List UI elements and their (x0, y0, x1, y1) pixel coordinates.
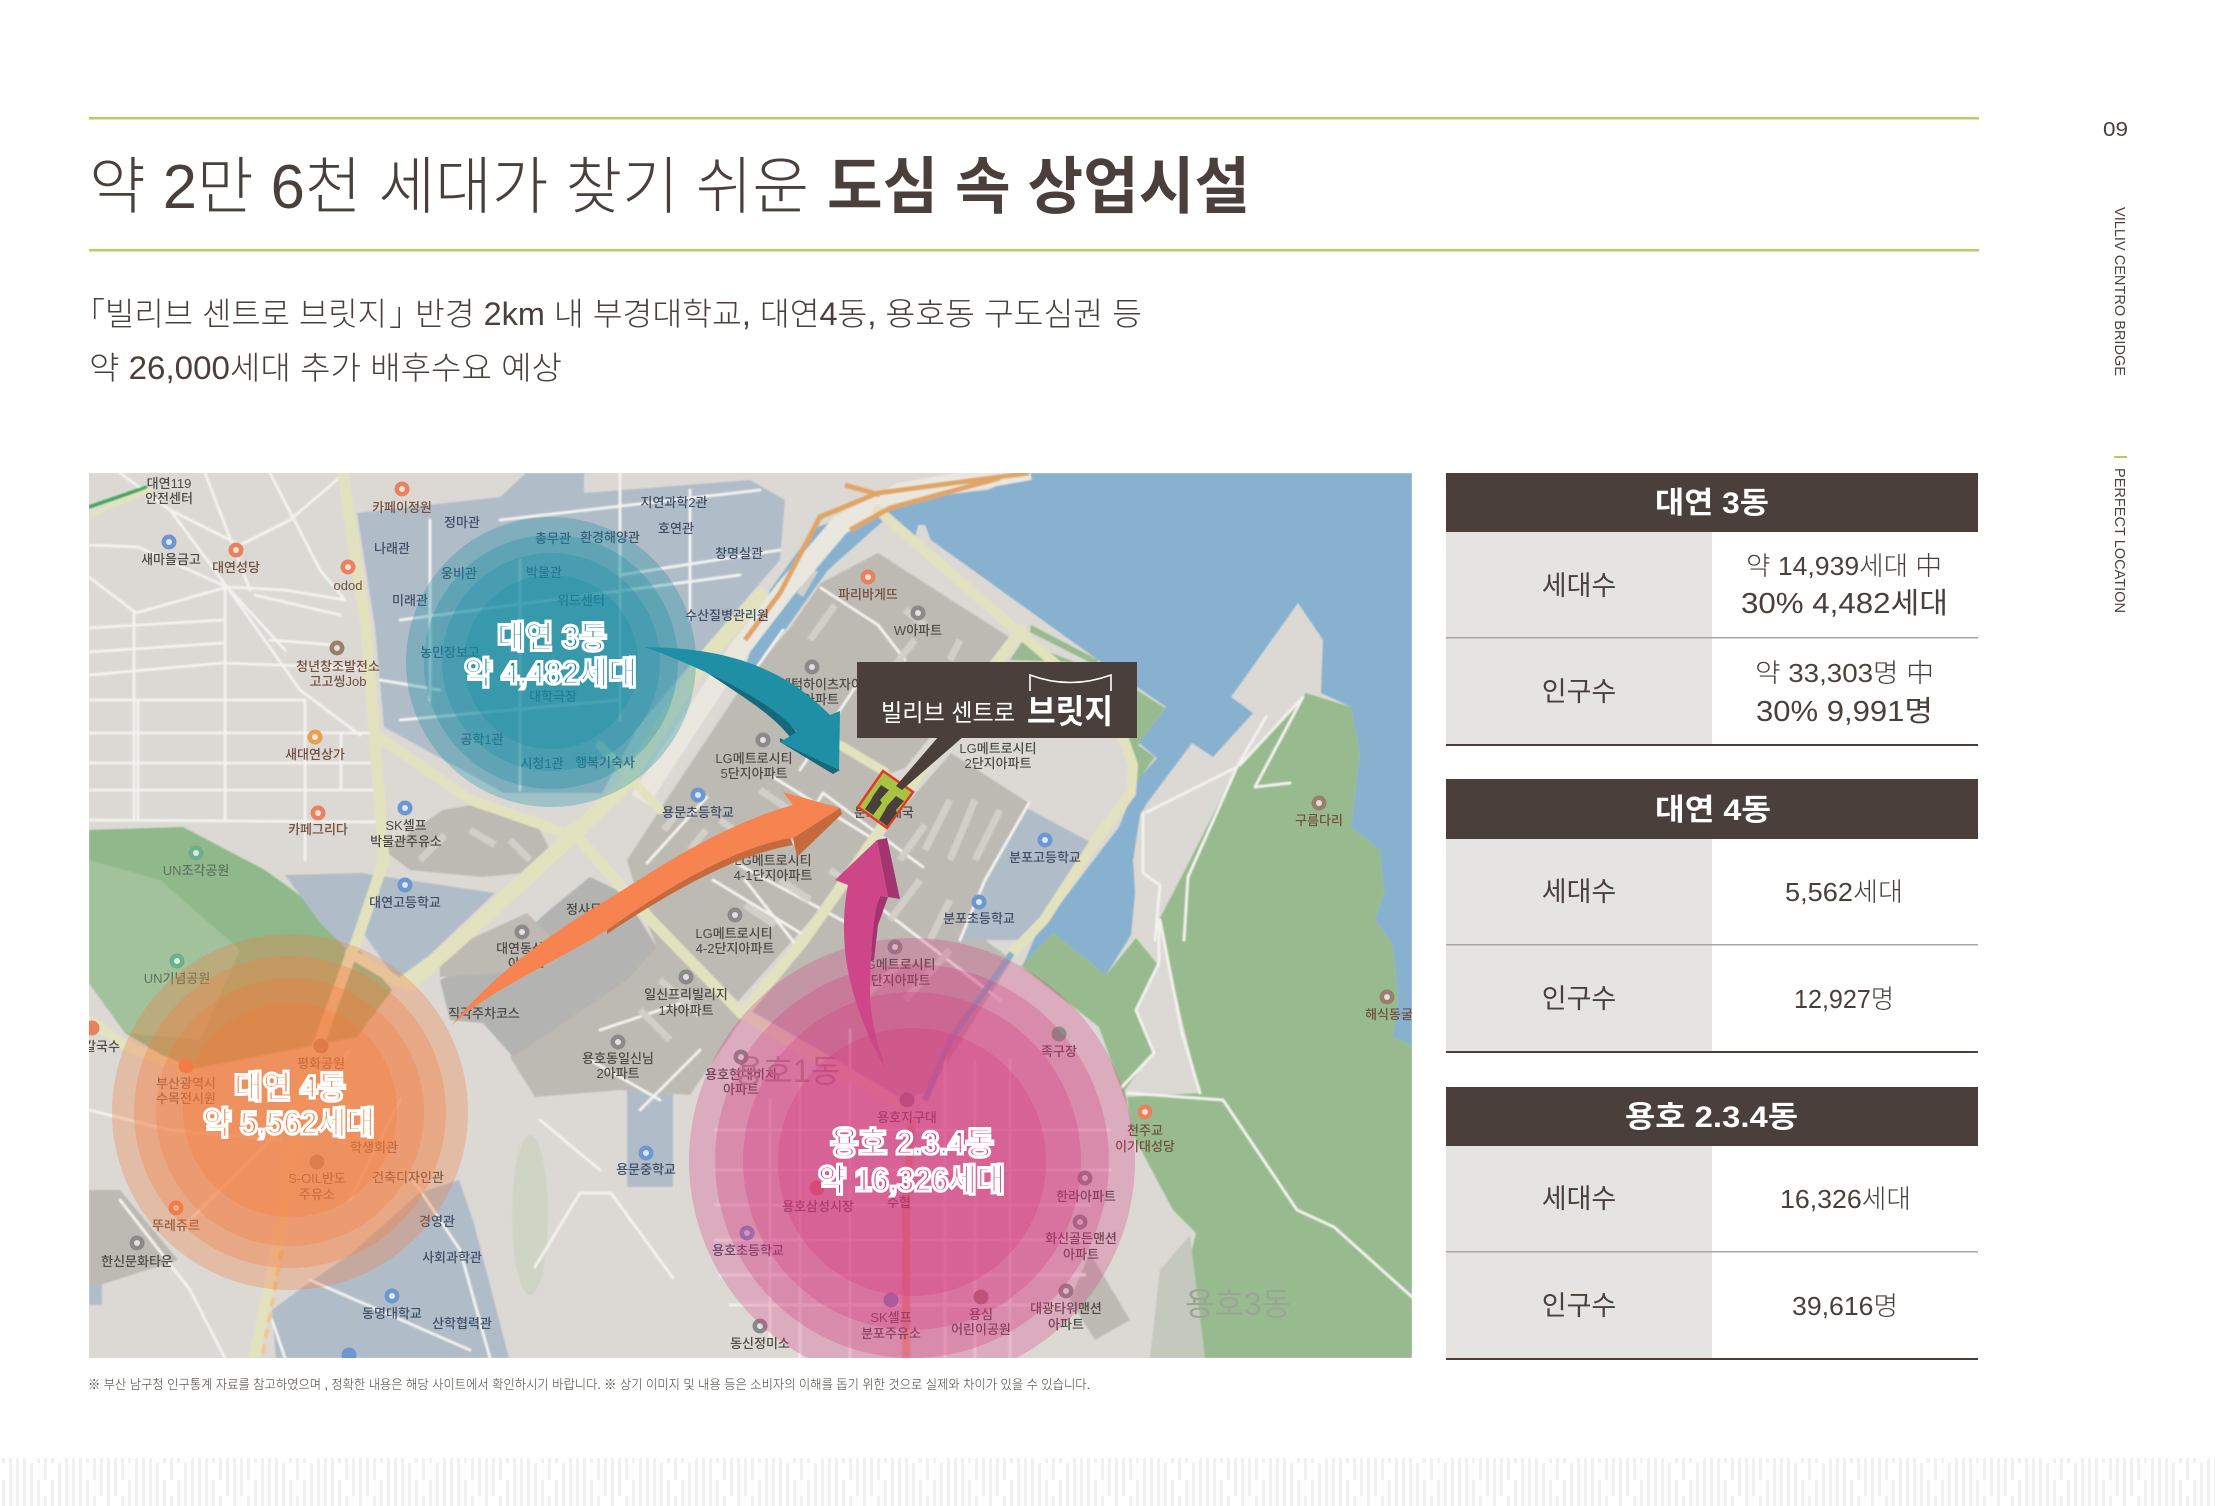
map place labels: 아파트 (1063, 1247, 1099, 1262)
map place labels: 경영관 (419, 1214, 455, 1229)
table: daeyeon 3-dong: 인구수 (1542, 677, 1616, 707)
map place labels: 호연관 (658, 521, 694, 536)
map place labels: 센텀하이츠자이 (779, 677, 863, 692)
map place labels: 분포고등학교 (1009, 850, 1081, 865)
table: yongho 2.3.4-dong: 용호 2.3.4동 (1625, 1101, 1798, 1134)
map place labels: 아파트 (1048, 1317, 1084, 1332)
table: yongho 2.3.4-dong: 세대수 (1542, 1184, 1616, 1214)
apartment blocks (420, 570, 1000, 1040)
map place labels: 아파트 (803, 692, 839, 707)
map place labels: 미래관 (392, 593, 428, 608)
arrow: pink from yongho (835, 838, 900, 1067)
map place labels: 이기대성당 (1115, 1139, 1175, 1154)
title: 약 2만 6천 세대가 찾기 쉬운 (89, 153, 809, 222)
map place labels: UN기념공원 (144, 971, 210, 986)
map place labels (84, 476, 1413, 1351)
map place labels: S-OIL반도 (288, 1171, 346, 1186)
table: yongho 2.3.4-dong: 39,616명 (1792, 1291, 1898, 1321)
map place labels: 새마을금고 (141, 552, 201, 567)
map place labels: 2단지아파트 (964, 756, 1032, 771)
map place labels: 공학1관 (460, 732, 504, 747)
map place labels: 2아파트 (596, 1066, 640, 1081)
map place labels: 총무관 (535, 531, 571, 546)
footer stripe pattern (0, 1458, 2215, 1506)
map place labels: 대광타워맨션 (1030, 1301, 1102, 1316)
map place labels: 용문중학교 (616, 1162, 676, 1177)
header rules (89, 117, 1979, 252)
map place labels: 4-2단지아파트 (696, 941, 774, 956)
map place labels: 지연과학2관 (640, 495, 708, 510)
map place labels: 용심 (969, 1307, 993, 1322)
map place labels: 4-1단지아파트 (734, 868, 812, 883)
circle label: daeyeon 3-dong (464, 619, 637, 691)
map place labels: W아파트 (894, 623, 942, 638)
map place labels: 위드센터 (557, 593, 605, 608)
map place labels: LG메트로시티 (959, 741, 1037, 756)
map place labels: 카페그리다 (288, 822, 348, 837)
map place labels: 대연성당 (212, 560, 260, 575)
map place labels: 아파트 (508, 956, 544, 971)
page number: 09 (2103, 119, 2128, 141)
map place labels: 천주교 (1127, 1123, 1163, 1138)
map place labels: 화신골든맨션 (1045, 1231, 1117, 1246)
map pins (84, 482, 1394, 1362)
circle label: yongho 2.3.4-dong (818, 1125, 1005, 1198)
map place labels: 칼국수 (84, 1039, 120, 1054)
subtitle: 빌리브 센트로 브릿지 (105, 296, 387, 332)
map place labels: 학생회관 (350, 1140, 398, 1155)
map place labels: 부산광역시 (156, 1076, 216, 1091)
map place labels: 어린이공원 (951, 1322, 1011, 1337)
callout: villiv centro bridge: 브릿지 (1027, 693, 1113, 730)
map place labels: 주유소 (299, 1187, 335, 1202)
map place labels: 분포주유소 (861, 1326, 921, 1341)
map place labels: 창명실관 (715, 546, 763, 561)
subtitle: 반경 2km 내 부경대학교, 대연4동, 용호동 구도심권 등 (415, 296, 1142, 332)
map place labels: 아파트 (723, 1082, 759, 1097)
map place labels: 나래관 (374, 541, 410, 556)
map place labels: 분포초등학교 (943, 911, 1015, 926)
table: daeyeon 3-dong: 약 14,939세대 中 (1746, 551, 1942, 581)
map place labels: 산학협력관 (432, 1316, 492, 1331)
table: daeyeon 3-dong: 대연 3동 (1655, 487, 1769, 520)
map place labels: 농민장보고 (420, 645, 480, 660)
map place labels: SK셀프 (385, 818, 427, 833)
circle label: yongho 2.3.4-dong: 용호 2.3.4동 (830, 1125, 994, 1161)
subtitle: 약 26,000세대 추가 배후수요 예상 (89, 350, 562, 386)
map place labels: 대학극장 (529, 689, 577, 704)
map place labels: 5단지아파트 (863, 973, 931, 988)
map place labels: 건축디자인관 (372, 1170, 444, 1185)
subtitle: 」 (389, 296, 421, 332)
map place labels: 박물관주유소 (370, 834, 442, 849)
table: daeyeon 4-dong: 세대수 (1542, 877, 1616, 907)
callout: villiv centro bridge (857, 662, 1137, 790)
map place labels: 1차아파트 (658, 1003, 714, 1018)
subtitle: 「 (73, 296, 105, 332)
table: daeyeon 3-dong: 약 33,303명 中 (1755, 658, 1934, 688)
table: daeyeon 4-dong: 인구수 (1542, 984, 1616, 1014)
table: daeyeon 3-dong: 30% 4,482세대 (1741, 587, 1948, 620)
map place labels: UN조각공원 (163, 863, 229, 878)
map place labels: 새대연상가 (285, 747, 345, 762)
map place labels: 환경해양관 (580, 530, 640, 545)
footnote: ※ 부산 남구청 인구통계 자료를 참고하였으며 , 정확한 내용은 해당 사이트에서 확인하시기 바랍니다. ※ 상기 이미지 및 내용 등은 소비자의 이해를 돕기 위한 것으로 실제와 차이가 있을 수 있습니다. (88, 1377, 1090, 1392)
callout: villiv centro bridge: 빌리브 센트로 (881, 700, 1015, 727)
map place labels: 정마관 (444, 515, 480, 530)
arrow: teal from daeyeon 3-dong (645, 647, 840, 774)
map place labels: 고고씽Job (310, 674, 366, 689)
arrow: orange from daeyeon 4-dong (452, 792, 842, 1025)
table: yongho 2.3.4-dong: 16,326세대 (1780, 1184, 1911, 1214)
major roads (254, 473, 384, 1358)
map place labels: 대연119 (147, 476, 191, 491)
side label: villiv centro bridge: VILLIV CENTRO BRIDGE (2111, 207, 2128, 376)
map place labels: 족구장 (1041, 1044, 1077, 1059)
map place labels: 용호현대비치 (705, 1067, 777, 1082)
map place labels: odod (334, 578, 362, 593)
map place labels: LG메트로시티 (695, 926, 773, 941)
map place labels: 용호초등학교 (712, 1243, 784, 1258)
map place labels: 행복기숙사 (575, 755, 635, 770)
circle label: daeyeon 3-dong: 약 4,482세대 (464, 655, 637, 691)
map place labels: 수산질병관리원 (685, 608, 769, 623)
map place labels: 사회과학관 (422, 1250, 482, 1265)
map place labels: 한라아파트 (1056, 1189, 1116, 1204)
map place labels: 파리바게뜨 (838, 587, 898, 602)
map panel (84, 470, 1413, 1384)
circle label: daeyeon 3-dong: 대연 3동 (497, 619, 607, 655)
map place labels: 정사무 (566, 902, 602, 917)
map place labels: 용문초등학교 (662, 805, 734, 820)
radius circle: daeyeon 3-dong (406, 517, 696, 807)
table: yongho 2.3.4-dong: 인구수 (1542, 1291, 1616, 1321)
map place labels: 시청1관 (520, 756, 564, 771)
table: daeyeon 4-dong: 5,562세대 (1785, 877, 1903, 907)
map place labels: 박물관 (526, 565, 562, 580)
map place labels: 직각주차코스 (448, 1006, 520, 1021)
map place labels: LG메트로시티 (715, 751, 793, 766)
table: daeyeon 3-dong: 30% 9,991명 (1756, 696, 1933, 728)
side label: perfect location: PERFECT LOCATION (2111, 468, 2128, 613)
map place labels: 뚜레쥬르 (152, 1218, 200, 1233)
map place labels: 대연고등학교 (369, 895, 441, 910)
map place labels: 평화공원 (297, 1056, 345, 1071)
table: daeyeon 4-dong (1446, 779, 1978, 1053)
white street grid (89, 473, 1412, 1358)
map place labels: 수협 (887, 1195, 911, 1210)
map place labels: 5단지아파트 (720, 766, 788, 781)
map place labels: 안전센터 (145, 491, 193, 506)
radius circle: daeyeon 4-dong (112, 934, 468, 1290)
table: daeyeon 4-dong: 12,927명 (1794, 984, 1894, 1014)
project site marker (858, 771, 913, 828)
radius circle: yongho 2.3.4-dong (689, 938, 1135, 1384)
map place labels: SK셀프 (870, 1310, 912, 1325)
table: daeyeon 3-dong: 세대수 (1542, 571, 1616, 601)
map place labels: 한신문화타운 (101, 1254, 173, 1269)
table: yongho 2.3.4-dong (1446, 1087, 1978, 1360)
map place labels: 대연동삼 (496, 941, 544, 956)
map place labels: 일신프리빌리지 (644, 987, 728, 1002)
map base: land, water, roads (89, 470, 1412, 1358)
map place labels: LG메트로시티 (858, 957, 936, 972)
subtitle (73, 296, 1142, 386)
circle label: yongho 2.3.4-dong: 약 16,326세대 (818, 1162, 1005, 1198)
title (89, 153, 1250, 222)
circle label: daeyeon 4-dong: 대연 4동 (234, 1069, 346, 1105)
map place labels: 용호삼성시장 (782, 1199, 854, 1214)
map place labels: 청년창조발전소 (296, 659, 380, 674)
circle label: daeyeon 4-dong: 약 5,562세대 (203, 1105, 375, 1141)
map place labels: 동명대학교 (362, 1306, 422, 1321)
circle label: daeyeon 4-dong (203, 1069, 375, 1141)
map place labels: 용호동일신님 (582, 1051, 654, 1066)
map place labels: 용호3동 (1185, 1286, 1291, 1322)
map place labels: LG메트로시티 (734, 853, 812, 868)
title: 도심 속 상업시설 (827, 153, 1250, 222)
map place labels: 용호지구대 (877, 1110, 937, 1125)
map place labels: 카페이정원 (372, 500, 432, 515)
map place labels: 분포우체국 (854, 805, 914, 820)
map place labels: 웅비관 (441, 566, 477, 581)
map place labels: 동신정미소 (730, 1336, 790, 1351)
table: daeyeon 3-dong (1446, 473, 1978, 746)
table: daeyeon 4-dong: 대연 4동 (1655, 794, 1771, 827)
map place labels: 용호1동 (734, 1053, 840, 1089)
map place labels: 해식동굴 (1365, 1007, 1413, 1022)
map place labels: 구름다리 (1295, 813, 1343, 828)
map place labels: 수목전시원 (156, 1091, 216, 1106)
